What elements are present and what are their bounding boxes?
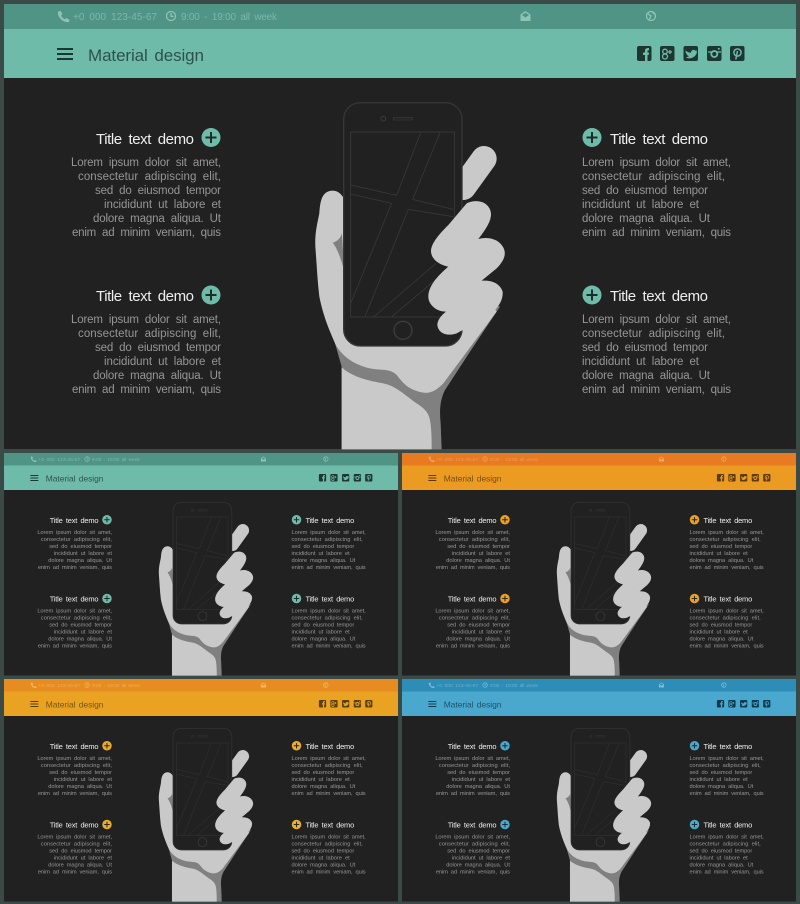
panel: small teal slide: enim ad minim veniam, quis bbox=[292, 643, 366, 650]
panel: small teal slide: dolore magna aliqua. Ut bbox=[292, 558, 356, 564]
text block: top left: dolore magna aliqua. Ut bbox=[93, 213, 222, 225]
text block: top left: Title text demo bbox=[96, 131, 194, 148]
panel: large teal slide: 9:00 - 19:00 all week bbox=[181, 12, 278, 23]
panel: small amber slide: sed do eiusmod tempor bbox=[49, 770, 112, 776]
social icons bbox=[637, 46, 744, 61]
panel: small blue slide: Lorem ipsum dolor sit amet, bbox=[690, 756, 764, 762]
panel: small teal slide: enim ad minim veniam, quis bbox=[292, 565, 366, 571]
panel: small blue slide: dolore magna aliqua. Ut bbox=[446, 784, 510, 790]
panel: small teal slide: dolore magna aliqua. Ut bbox=[48, 636, 112, 643]
text block: bottom right: dolore magna aliqua. Ut bbox=[582, 370, 711, 382]
panel: large teal slide bbox=[4, 4, 796, 449]
panel: small orange slide: consectetur adipiscing elit, bbox=[439, 537, 510, 543]
panel: small teal slide: enim ad minim veniam, quis bbox=[38, 565, 112, 571]
panel: small amber slide: enim ad minim veniam, quis bbox=[38, 869, 112, 876]
panel: small amber slide: Lorem ipsum dolor sit amet, bbox=[292, 834, 366, 841]
panel: small teal slide: Lorem ipsum dolor sit amet, bbox=[292, 608, 366, 615]
menu icon bbox=[57, 49, 73, 59]
panel: small orange slide: enim ad minim veniam, quis bbox=[436, 643, 510, 650]
panel: small teal slide: consectetur adipiscing elit, bbox=[41, 537, 112, 543]
panel: small teal slide: sed do eiusmod tempor bbox=[292, 622, 354, 629]
panel: small orange slide: Lorem ipsum dolor sit amet, bbox=[690, 608, 764, 615]
panel: small blue slide: enim ad minim veniam, quis bbox=[436, 869, 510, 876]
panel: small orange slide: incididunt ut labore et bbox=[452, 629, 510, 636]
text block: top right: dolore magna aliqua. Ut bbox=[582, 213, 711, 225]
plus icons bbox=[202, 128, 602, 304]
text block: top right: Title text demo bbox=[610, 131, 708, 148]
panel: small orange slide: incididunt ut labore et bbox=[452, 551, 510, 557]
panel: small teal slide: 9:00 - 19:00 all week bbox=[92, 457, 140, 463]
panel: small orange slide: consectetur adipiscing elit, bbox=[690, 615, 761, 622]
panel: small orange slide: Material design bbox=[444, 473, 502, 484]
panel: small teal slide: Material design bbox=[46, 473, 104, 484]
panel: small orange slide: Title text demo bbox=[448, 594, 497, 604]
panel: small amber slide: Lorem ipsum dolor sit amet, bbox=[37, 756, 112, 762]
text block: top left: incididunt ut labore et bbox=[104, 199, 222, 211]
text block: bottom left: dolore magna aliqua. Ut bbox=[93, 370, 222, 382]
panel: small orange slide: Title text demo bbox=[703, 516, 752, 525]
panel: small teal slide: sed do eiusmod tempor bbox=[292, 544, 354, 550]
text block: top left bbox=[71, 131, 222, 239]
panel: small orange slide: incididunt ut labore et bbox=[690, 551, 748, 557]
panel: small amber slide: enim ad minim veniam, quis bbox=[38, 791, 112, 797]
panel: small amber slide: sed do eiusmod tempor bbox=[292, 770, 354, 776]
text block: bottom left: incididunt ut labore et bbox=[104, 356, 222, 368]
panel: small amber slide: dolore magna aliqua. Ut bbox=[292, 784, 356, 790]
panel: small blue slide: sed do eiusmod tempor bbox=[447, 848, 510, 855]
panel: small teal slide: Title text demo bbox=[50, 516, 99, 525]
text block: bottom right: Lorem ipsum dolor sit amet, bbox=[582, 314, 731, 326]
text block: top right: enim ad minim veniam, quis bbox=[582, 227, 731, 239]
panel: small orange slide: enim ad minim veniam, quis bbox=[690, 565, 764, 571]
panel: small amber slide: consectetur adipiscing elit, bbox=[292, 841, 363, 848]
panel: small amber slide: Lorem ipsum dolor sit amet, bbox=[292, 756, 366, 762]
panel: small amber slide: Title text demo bbox=[305, 820, 354, 830]
panel: small orange slide: enim ad minim veniam, quis bbox=[436, 565, 510, 571]
text block: top left: Lorem ipsum dolor sit amet, bbox=[71, 157, 221, 169]
panel: small blue slide: Title text demo bbox=[448, 820, 497, 830]
panel: small teal slide: dolore magna aliqua. Ut bbox=[48, 558, 112, 564]
panel: small teal slide: dolore magna aliqua. Ut bbox=[292, 636, 356, 643]
panel: small teal slide: incididunt ut labore et bbox=[292, 551, 350, 557]
text block: bottom left: Lorem ipsum dolor sit amet, bbox=[71, 314, 221, 326]
panel: small orange slide: 9:00 - 19:00 all week bbox=[490, 457, 538, 463]
panel: small amber slide: sed do eiusmod tempor bbox=[49, 848, 112, 855]
text block: bottom right: sed do eiusmod tempor bbox=[582, 342, 708, 354]
text block: bottom right: enim ad minim veniam, quis bbox=[582, 384, 731, 396]
text block: bottom left: sed do eiusmod tempor bbox=[95, 342, 221, 354]
panel: small blue slide: Title text demo bbox=[703, 742, 752, 751]
panel: small amber slide: incididunt ut labore et bbox=[292, 777, 350, 783]
panel: small blue slide: enim ad minim veniam, quis bbox=[690, 869, 764, 876]
panel: small blue slide: dolore magna aliqua. Ut bbox=[690, 784, 754, 790]
panel: small blue slide: consectetur adipiscing elit, bbox=[439, 763, 510, 769]
panel: small blue slide: consectetur adipiscing elit, bbox=[439, 841, 510, 848]
panel: small amber slide: sed do eiusmod tempor bbox=[292, 848, 354, 855]
panel: small teal slide: enim ad minim veniam, quis bbox=[38, 643, 112, 650]
panel: small teal slide: Title text demo bbox=[305, 516, 354, 525]
text block: bottom right: consectetur adipiscing elit, bbox=[582, 328, 725, 340]
panel: small teal slide: Title text demo bbox=[305, 594, 354, 604]
text block: top left: sed do eiusmod tempor bbox=[95, 185, 221, 197]
panel: small amber slide: Material design bbox=[46, 699, 104, 710]
text block: bottom right: incididunt ut labore et bbox=[582, 356, 700, 368]
panel: small teal slide: Lorem ipsum dolor sit amet, bbox=[37, 530, 112, 536]
contact text: +0 000 123-45-67 bbox=[73, 12, 157, 23]
panel: small teal slide: consectetur adipiscing elit, bbox=[292, 537, 363, 543]
panel: small orange slide: consectetur adipiscing elit, bbox=[439, 615, 510, 622]
panel: small blue slide: sed do eiusmod tempor bbox=[690, 770, 752, 776]
header title: Material design bbox=[88, 46, 204, 65]
panel: small blue slide: Lorem ipsum dolor sit amet, bbox=[690, 834, 764, 841]
panel: small amber slide: dolore magna aliqua. Ut bbox=[48, 862, 112, 869]
panel: small orange slide: sed do eiusmod tempor bbox=[690, 622, 752, 629]
panel: small blue slide: incididunt ut labore et bbox=[690, 855, 748, 862]
panel: small amber slide: incididunt ut labore et bbox=[292, 855, 350, 862]
panel: small amber slide: incididunt ut labore et bbox=[54, 855, 112, 862]
panel: small blue slide: 9:00 - 19:00 all week bbox=[490, 683, 538, 689]
panel: small teal slide: incididunt ut labore et bbox=[292, 629, 350, 636]
panel: small blue slide: enim ad minim veniam, quis bbox=[436, 791, 510, 797]
panel: small amber slide: consectetur adipiscing elit, bbox=[41, 763, 112, 769]
panel: small amber slide: Title text demo bbox=[50, 820, 99, 830]
text block: bottom left bbox=[71, 288, 222, 396]
panel: small blue slide: +0 000 123-45-67 bbox=[436, 683, 478, 689]
panel: small amber slide: consectetur adipiscing elit, bbox=[41, 841, 112, 848]
text block: top left: enim ad minim veniam, quis bbox=[72, 227, 221, 239]
panel: small amber slide: dolore magna aliqua. Ut bbox=[48, 784, 112, 790]
panel: small teal slide: Lorem ipsum dolor sit amet, bbox=[292, 530, 366, 536]
panel: small orange slide: enim ad minim veniam, quis bbox=[690, 643, 764, 650]
panel: small amber slide: Title text demo bbox=[50, 742, 99, 751]
panel: small orange slide: Lorem ipsum dolor sit amet, bbox=[690, 530, 764, 536]
panel: small orange slide bbox=[402, 453, 796, 676]
panel: small orange slide: dolore magna aliqua. Ut bbox=[446, 636, 510, 643]
text block: top right: sed do eiusmod tempor bbox=[582, 185, 708, 197]
panel: small blue slide bbox=[402, 679, 796, 902]
panel: small blue slide: sed do eiusmod tempor bbox=[447, 770, 510, 776]
panel: small orange slide: Title text demo bbox=[448, 516, 497, 525]
text block: bottom left: enim ad minim veniam, quis bbox=[72, 384, 221, 396]
panel: small amber slide: enim ad minim veniam, quis bbox=[292, 791, 366, 797]
text block: top right: incididunt ut labore et bbox=[582, 199, 700, 211]
panel: small teal slide: +0 000 123-45-67 bbox=[38, 457, 80, 463]
panel: small blue slide: sed do eiusmod tempor bbox=[690, 848, 752, 855]
panel: small orange slide: sed do eiusmod tempor bbox=[690, 544, 752, 550]
panel: small blue slide: consectetur adipiscing elit, bbox=[690, 841, 761, 848]
panel: small amber slide bbox=[4, 679, 398, 902]
panel: small teal slide: sed do eiusmod tempor bbox=[49, 622, 112, 629]
panel: small orange slide: +0 000 123-45-67 bbox=[436, 457, 478, 463]
panel: small orange slide: Lorem ipsum dolor sit amet, bbox=[435, 608, 510, 615]
panel: small orange slide: dolore magna aliqua. Ut bbox=[446, 558, 510, 564]
panel: small amber slide: 9:00 - 19:00 all week bbox=[92, 683, 140, 689]
panel: small teal slide: Lorem ipsum dolor sit amet, bbox=[37, 608, 112, 615]
text block: bottom right: Title text demo bbox=[610, 288, 708, 305]
text block: top right: Lorem ipsum dolor sit amet, bbox=[582, 157, 731, 169]
panel: small teal slide: consectetur adipiscing elit, bbox=[292, 615, 363, 622]
panel: small orange slide: incididunt ut labore et bbox=[690, 629, 748, 636]
panel: small blue slide: incididunt ut labore et bbox=[690, 777, 748, 783]
panel: small orange slide: dolore magna aliqua. Ut bbox=[690, 636, 754, 643]
panel: small orange slide: Title text demo bbox=[703, 594, 752, 604]
panel: small teal slide: Title text demo bbox=[50, 594, 99, 604]
panel: small amber slide: Title text demo bbox=[305, 742, 354, 751]
panel: small blue slide: dolore magna aliqua. Ut bbox=[446, 862, 510, 869]
text block: bottom right bbox=[582, 288, 731, 396]
panel: small orange slide: sed do eiusmod tempor bbox=[447, 622, 510, 629]
text block: top right: consectetur adipiscing elit, bbox=[582, 171, 725, 183]
panel: small blue slide: Lorem ipsum dolor sit amet, bbox=[435, 756, 510, 762]
text block: bottom left: Title text demo bbox=[96, 288, 194, 305]
panel: small blue slide: dolore magna aliqua. Ut bbox=[690, 862, 754, 869]
text block: top left: consectetur adipiscing elit, bbox=[78, 171, 221, 183]
panel: small teal slide: sed do eiusmod tempor bbox=[49, 544, 112, 550]
panel: small amber slide: incididunt ut labore et bbox=[54, 777, 112, 783]
panel: small teal slide: incididunt ut labore et bbox=[54, 551, 112, 557]
panel: small orange slide: sed do eiusmod tempor bbox=[447, 544, 510, 550]
panel: small orange slide: Lorem ipsum dolor sit amet, bbox=[435, 530, 510, 536]
text block: top right bbox=[582, 131, 731, 239]
panel: small teal slide: consectetur adipiscing elit, bbox=[41, 615, 112, 622]
panel: small teal slide bbox=[4, 453, 398, 676]
panel: small blue slide: incididunt ut labore et bbox=[452, 855, 510, 862]
panel: small amber slide: dolore magna aliqua. Ut bbox=[292, 862, 356, 869]
panel: small amber slide: +0 000 123-45-67 bbox=[38, 683, 80, 689]
panel: small blue slide: consectetur adipiscing elit, bbox=[690, 763, 761, 769]
hand holding phone bbox=[315, 103, 505, 449]
panel: small amber slide: consectetur adipiscing elit, bbox=[292, 763, 363, 769]
panel: small blue slide: Lorem ipsum dolor sit amet, bbox=[435, 834, 510, 841]
panel: small blue slide: enim ad minim veniam, quis bbox=[690, 791, 764, 797]
panel: small amber slide: Lorem ipsum dolor sit amet, bbox=[37, 834, 112, 841]
panel: small amber slide: enim ad minim veniam, quis bbox=[292, 869, 366, 876]
panel: small teal slide: incididunt ut labore et bbox=[54, 629, 112, 636]
panel: small orange slide: dolore magna aliqua. Ut bbox=[690, 558, 754, 564]
panel: small blue slide: Material design bbox=[444, 699, 502, 710]
panel: small blue slide: Title text demo bbox=[448, 742, 497, 751]
panel: small orange slide: consectetur adipiscing elit, bbox=[690, 537, 761, 543]
panel: small blue slide: incididunt ut labore et bbox=[452, 777, 510, 783]
text block: bottom left: consectetur adipiscing elit, bbox=[78, 328, 221, 340]
panel: small blue slide: Title text demo bbox=[703, 820, 752, 830]
